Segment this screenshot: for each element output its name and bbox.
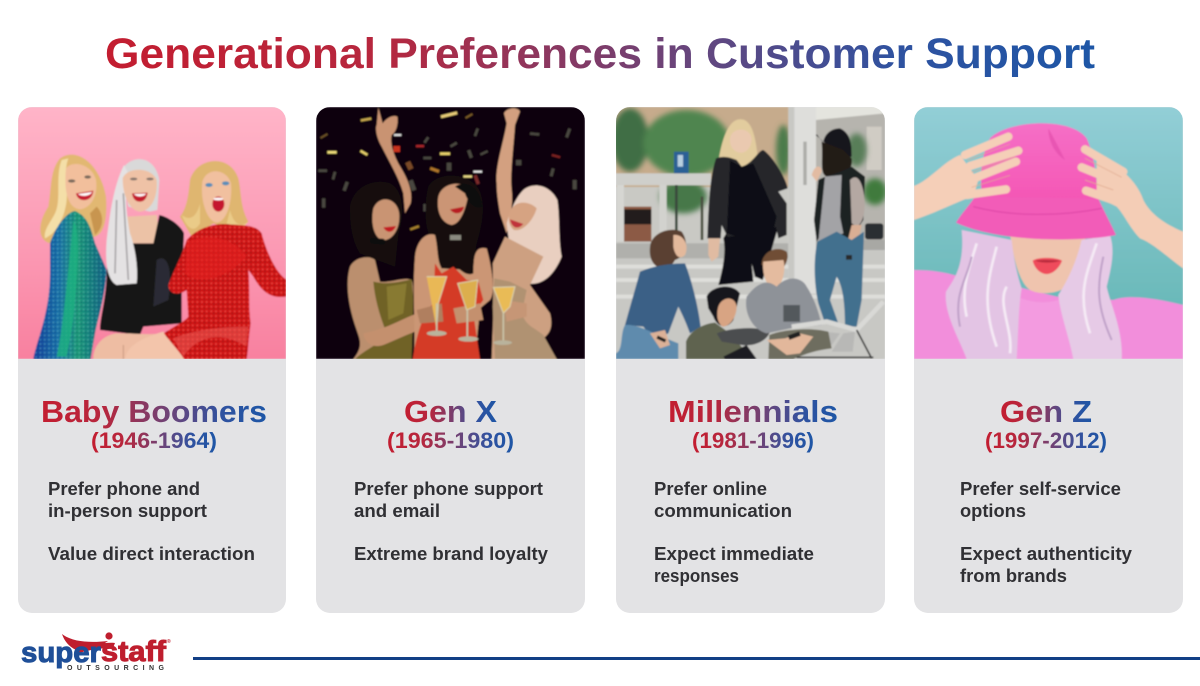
text block: preferences: Expect immediate xyxy=(654,544,814,564)
text block: preferences: from brands xyxy=(960,566,1067,586)
title: Generational Preferences in Customer Support xyxy=(105,30,1095,78)
text block: preferences: Extreme brand loyalty xyxy=(354,544,548,564)
text block: preferences: Prefer online xyxy=(654,479,767,499)
years: 1965-1980: (1965-1980) xyxy=(387,428,514,453)
panel: Baby Boomers xyxy=(18,107,286,613)
text block: preferences: Value direct interaction xyxy=(48,544,255,564)
photo: three women with champagne and confetti xyxy=(316,107,585,359)
text block: preferences: Expect authenticity xyxy=(960,544,1132,564)
logo: SuperStaff Outsourcing: staff xyxy=(101,636,166,668)
photo: group of young people outdoors xyxy=(612,107,887,359)
logo: SuperStaff Outsourcing: ® xyxy=(167,638,171,645)
logo: SuperStaff Outsourcing: OUTSOURCING xyxy=(67,665,165,672)
text block: preferences xyxy=(960,479,1132,586)
text block: preferences xyxy=(48,479,255,564)
heading: Gen X: Gen X xyxy=(404,394,497,429)
text block: preferences xyxy=(654,479,814,586)
text block: preferences: Prefer self-service xyxy=(960,479,1121,499)
photo: woman in pink bucket hat xyxy=(914,107,1183,359)
text block: preferences: options xyxy=(960,501,1026,521)
text block: preferences: in-person support xyxy=(48,501,207,521)
years: 1946-1964: (1946-1964) xyxy=(91,428,217,453)
heading: Gen Z: Gen Z xyxy=(1000,394,1092,429)
text block: preferences: and email xyxy=(354,501,440,521)
panel: Gen X xyxy=(316,107,585,613)
panel: Millennials xyxy=(612,107,887,613)
heading: Millennials: Millennials xyxy=(668,394,838,429)
logo: SuperStaff Outsourcing xyxy=(21,632,171,672)
text block: preferences: responses xyxy=(654,566,739,586)
text block: preferences: Prefer phone and xyxy=(48,479,200,499)
panel: Gen Z xyxy=(914,107,1183,613)
photo: three women in sequin dresses on pink xyxy=(18,107,286,359)
years: 1997-2012: (1997-2012) xyxy=(985,428,1107,453)
years: 1981-1996: (1981-1996) xyxy=(692,428,814,453)
text block: preferences xyxy=(354,479,548,564)
text block: preferences: Prefer phone support xyxy=(354,479,543,499)
logo: SuperStaff Outsourcing: super xyxy=(21,637,101,669)
heading: Baby Boomers: Baby Boomers xyxy=(41,394,267,429)
text block: preferences: communication xyxy=(654,501,792,521)
